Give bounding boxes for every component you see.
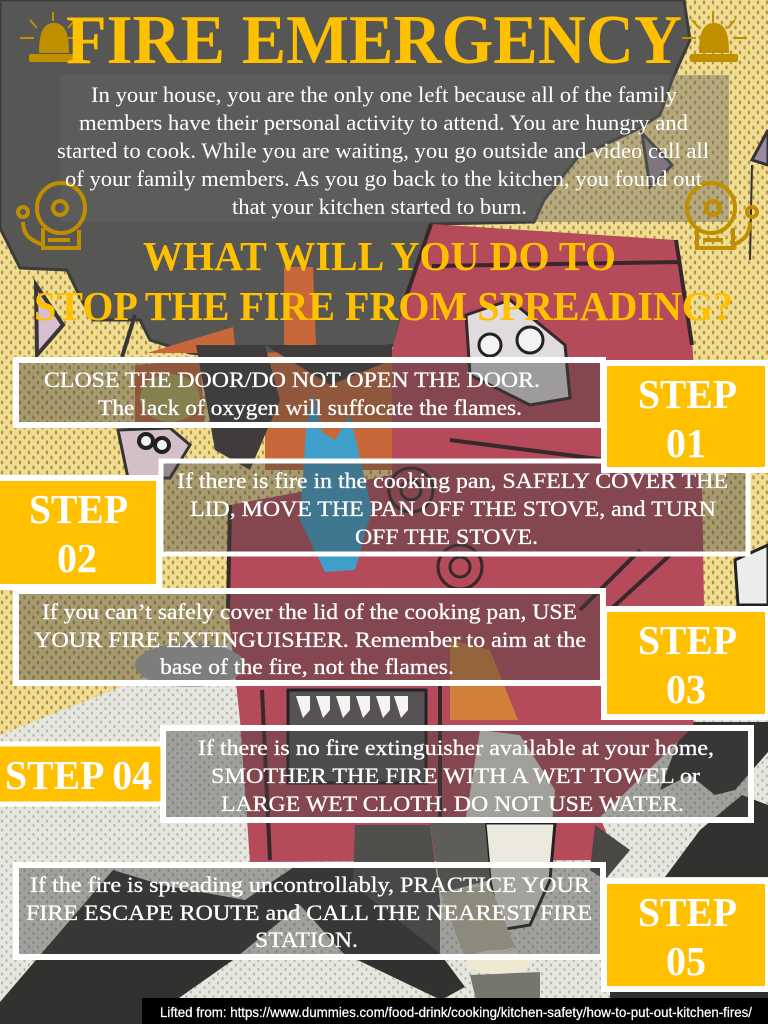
step 3 text box: YOUR FIRE EXTINGUISHER. Remember to aim at the (34, 627, 586, 652)
yellow flame on oven (450, 640, 518, 720)
step 5 tag: 05 (666, 938, 706, 984)
step 2 tag: STEP (29, 486, 128, 532)
paragraph backdrop (60, 75, 729, 222)
icon: siren left (20, 12, 81, 62)
flames (147, 267, 316, 353)
question heading (34, 233, 733, 329)
step 3 tag: STEP (638, 617, 737, 663)
step 4 text box: SMOTHER THE FIRE WITH A WET TOWEL or (211, 763, 701, 788)
step 4 tag: STEP 04 (5, 752, 152, 798)
step 3 text box: If you can’t safely cover the lid of the cooking pan, USE (42, 599, 577, 624)
step 1 tag: STEP (638, 371, 737, 417)
step 5 text box: If the fire is spreading uncontrollably, PRACTICE YOUR (30, 872, 590, 897)
blue flame (300, 393, 372, 572)
right edge figure (735, 545, 768, 605)
icon: bell left (18, 183, 85, 248)
icon: siren right (682, 12, 747, 62)
intro text: members have their personal activity to attend. You are hungry and (79, 110, 688, 135)
step 3 tag (604, 609, 768, 717)
intro text (57, 82, 709, 219)
question heading: STOP THE FIRE FROM SPREADING? (34, 283, 733, 329)
step 2 text box (161, 461, 748, 554)
source footer: Lifted from: https://www.dummies.com/food-drink/cooking/kitchen-safety/how-to-put-out-kitchen-fires/ (160, 1004, 752, 1020)
step 5 text box (16, 865, 603, 957)
source footer (142, 998, 768, 1024)
intro text: that your kitchen started to burn. (232, 194, 527, 219)
floor grey spot (135, 643, 245, 687)
step 4 text box: LARGE WET CLOTH. DO NOT USE WATER. (221, 791, 684, 816)
step 5 text box: FIRE ESCAPE ROUTE and CALL THE NEAREST FIRE (26, 900, 592, 925)
stove spirals (438, 545, 482, 589)
step 2 text box: If there is fire in the cooking pan, SAFELY COVER THE (177, 468, 728, 493)
step 2 text box: OFF THE STOVE. (355, 524, 538, 549)
step 1 text box: CLOSE THE DOOR/DO NOT OPEN THE DOOR. (44, 367, 540, 392)
step 5 tag: STEP (638, 889, 737, 935)
step 2 tag: 02 (57, 535, 97, 581)
step 3 tag: 03 (666, 666, 706, 712)
step 5 tag (604, 881, 768, 989)
step 2 tag (0, 478, 159, 587)
clock panel (466, 300, 570, 405)
left triangle (36, 285, 63, 355)
step 5 text box: STATION. (255, 927, 358, 952)
cartoon character (353, 825, 440, 953)
step 3 text box (16, 591, 603, 683)
stove upper body (392, 224, 702, 480)
title: FIRE EMERGENCY (66, 2, 682, 79)
question heading: WHAT WILL YOU DO TO (143, 233, 616, 279)
stove mouth (288, 690, 426, 783)
stove lines (228, 224, 700, 860)
step 1 text box (16, 360, 603, 425)
intro text: In your house, you are the only one left because all of the family (91, 82, 677, 107)
step 2 text box: LID, MOVE THE PAN OFF THE STOVE, and TURN (190, 496, 716, 521)
step 4 text box: If there is no fire extinguisher available at your home, (198, 735, 714, 760)
smoke cloud (0, 0, 690, 360)
stove lower body (228, 475, 704, 862)
intro text: started to cook. While you are waiting, you go outside and video call all (57, 138, 709, 163)
floor stripes (0, 722, 768, 1024)
small creature (118, 428, 190, 478)
step 1 text box: The lack of oxygen will suffocate the flames. (98, 395, 522, 420)
step 4 text box (163, 728, 751, 820)
floor (0, 640, 768, 1024)
intro text: of your family members. As you go back to the kitchen, you found out (65, 166, 702, 191)
icon: bell right (687, 183, 757, 248)
step 1 tag: 01 (666, 420, 706, 466)
step 3 text box: base of the fire, not the flames. (160, 654, 454, 679)
step 1 tag (604, 363, 768, 470)
